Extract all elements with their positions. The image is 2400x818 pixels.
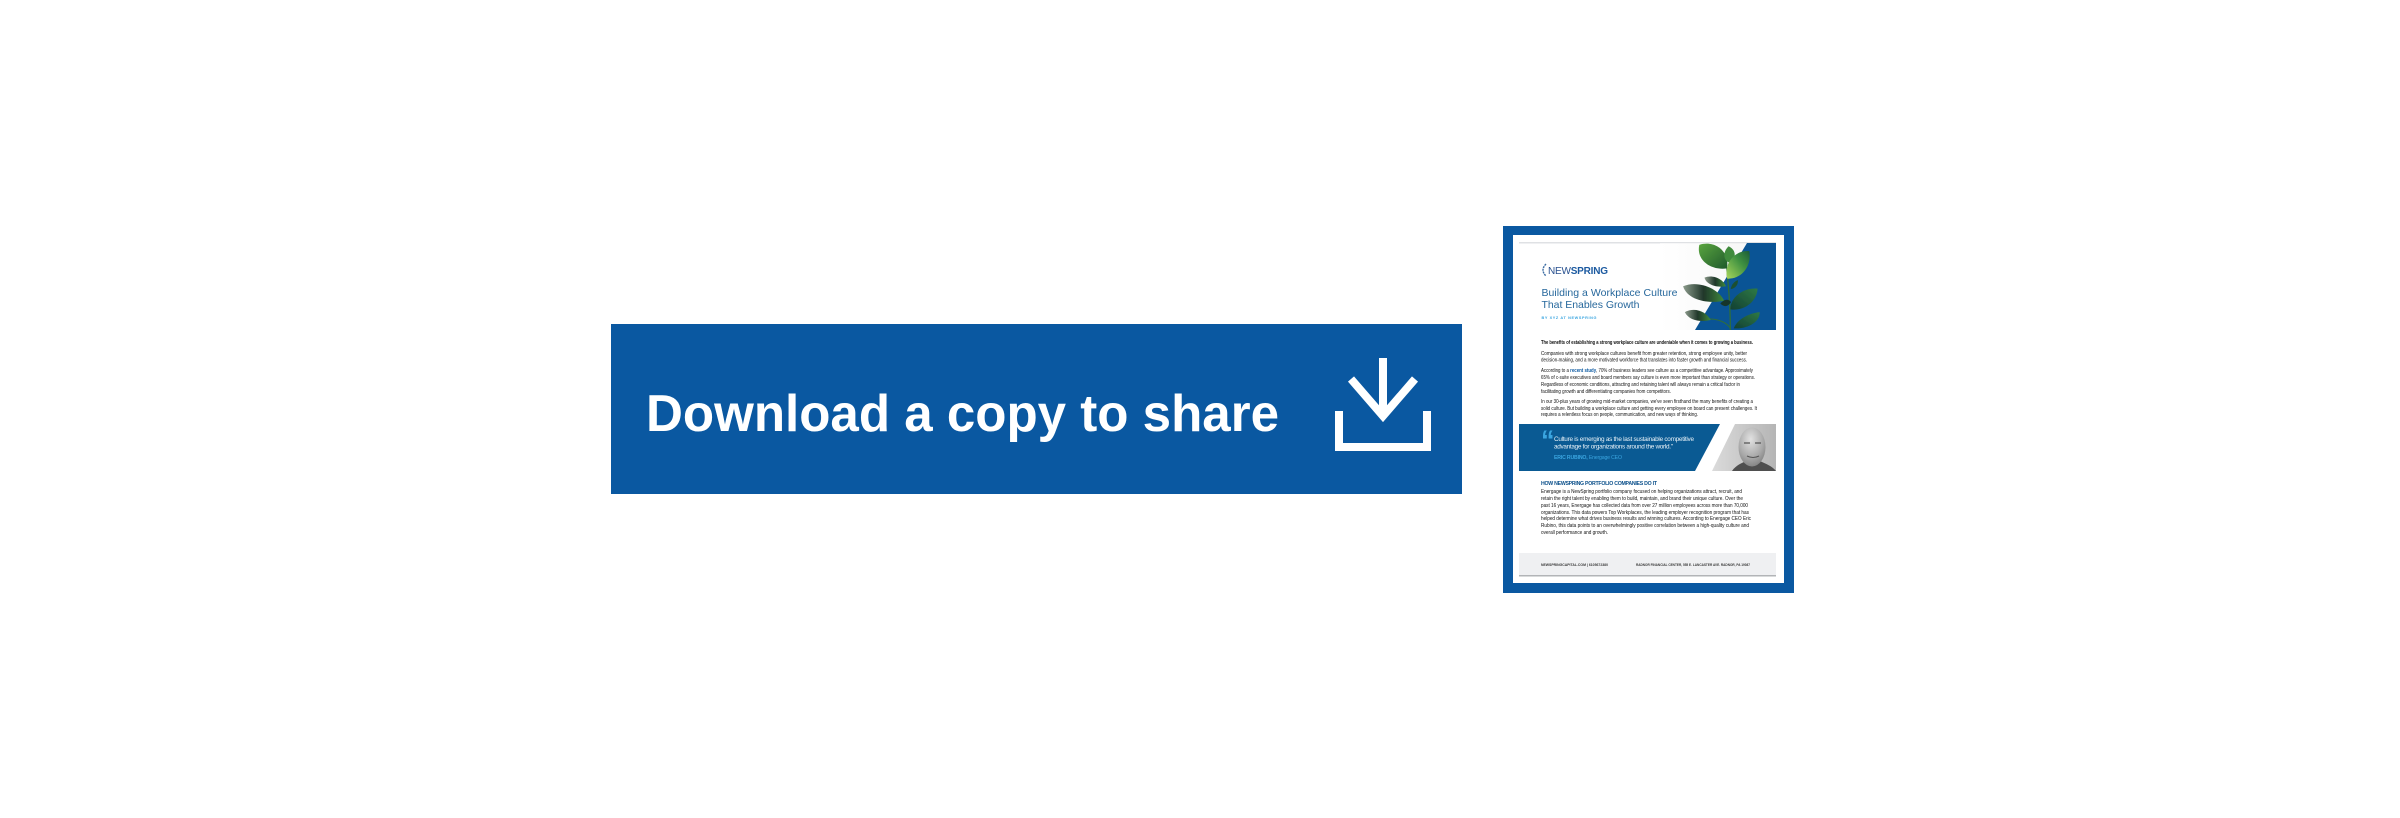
document title: Building a Workplace Culture: [1542, 287, 1678, 299]
quote text: [1554, 436, 1694, 450]
icon: download arrow into tray: [1339, 358, 1427, 447]
download banner: [611, 324, 1462, 494]
section body text: Rubino, this data points to an overwhelmingly positive correlation between a high-quality culture and: [1541, 523, 1749, 529]
section body text: Energage is a NewSpring portfolio company focused on helping organizations attract, recruit, and: [1541, 489, 1742, 495]
quote text: Culture is emerging as the last sustainable competitive: [1554, 436, 1694, 443]
document intro body text: Regardless of economic conditions, attracting and retaining talent will always remain a critical factor in: [1541, 382, 1740, 388]
document intro body text: [1541, 340, 1757, 418]
portrait photo: [1710, 424, 1776, 471]
section body text: overall performance and growth.: [1541, 530, 1608, 536]
document intro body text: Companies with strong workplace cultures benefit from greater retention, strong employee unity, better: [1541, 351, 1747, 357]
document thumbnail: [1503, 226, 1794, 593]
document header image with leaves: [1660, 243, 1776, 333]
banner text: Download a copy to share: [646, 385, 1279, 443]
document intro body text: decision-making, and a more motivated workforce that translates into faster growth and financial success.: [1541, 358, 1747, 364]
section body text: organizations. This data powers Top Workplaces, the leading employer recognition program that has: [1541, 510, 1749, 516]
quote text: advantage for organizations around the world.": [1554, 444, 1673, 450]
quote attribution: ERIC RUBINO, Energage CEO: [1554, 455, 1622, 461]
document footer: [1519, 553, 1776, 576]
document intro body text: According to a recent study, 70% of business leaders see culture as a competitive advantage. Approximately: [1541, 368, 1753, 374]
document intro body text: solid culture. But building a workplace culture and getting every employee on board can present challenges. It: [1541, 406, 1757, 412]
byline: BY XYZ AT NEWSPRING: [1542, 316, 1597, 320]
document intro body text: The benefits of establishing a strong workplace culture are undeniable when it comes to growing a business.: [1541, 340, 1753, 346]
document intro body text: facilitating growth and differentiating companies from competitors.: [1541, 389, 1671, 395]
section body text: retain the right talent by enabling them to build, maintain, and brand their unique culture. Over the: [1541, 496, 1743, 502]
section body text: past 16 years, Energage has collected data from over 27 million employees across more than 70,000: [1541, 503, 1748, 509]
footer address: RADNOR FINANCIAL CENTER, 555 E. LANCASTER AVE. RADNOR, PA 19087: [1636, 563, 1750, 567]
section heading: HOW NEWSPRING PORTFOLIO COMPANIES DO IT: [1541, 481, 1658, 487]
footer contact: NEWSPRINGCAPITAL.COM | 6105672380: [1541, 563, 1608, 567]
document title: That Enables Growth: [1542, 299, 1640, 311]
document intro body text: requires a relentless focus on people, communication, and new ways of thinking.: [1541, 412, 1698, 418]
section body text: [1541, 489, 1751, 536]
section body text: helped determine what drives business results and winning cultures. According to Energage CEO Eric: [1541, 516, 1751, 522]
logo: NewSpring: NEWSPRING: [1548, 266, 1608, 277]
quote marks: “: [1541, 425, 1554, 455]
document intro body text: 65% of c-suite executives and board members say culture is even more important than strategy or operations.: [1541, 375, 1755, 381]
document intro body text: In our 30-plus years of growing mid-market companies, we've seen firsthand the many benefits of creating a: [1541, 399, 1754, 405]
document title: [1542, 287, 1678, 311]
quote band: [1519, 424, 1720, 471]
